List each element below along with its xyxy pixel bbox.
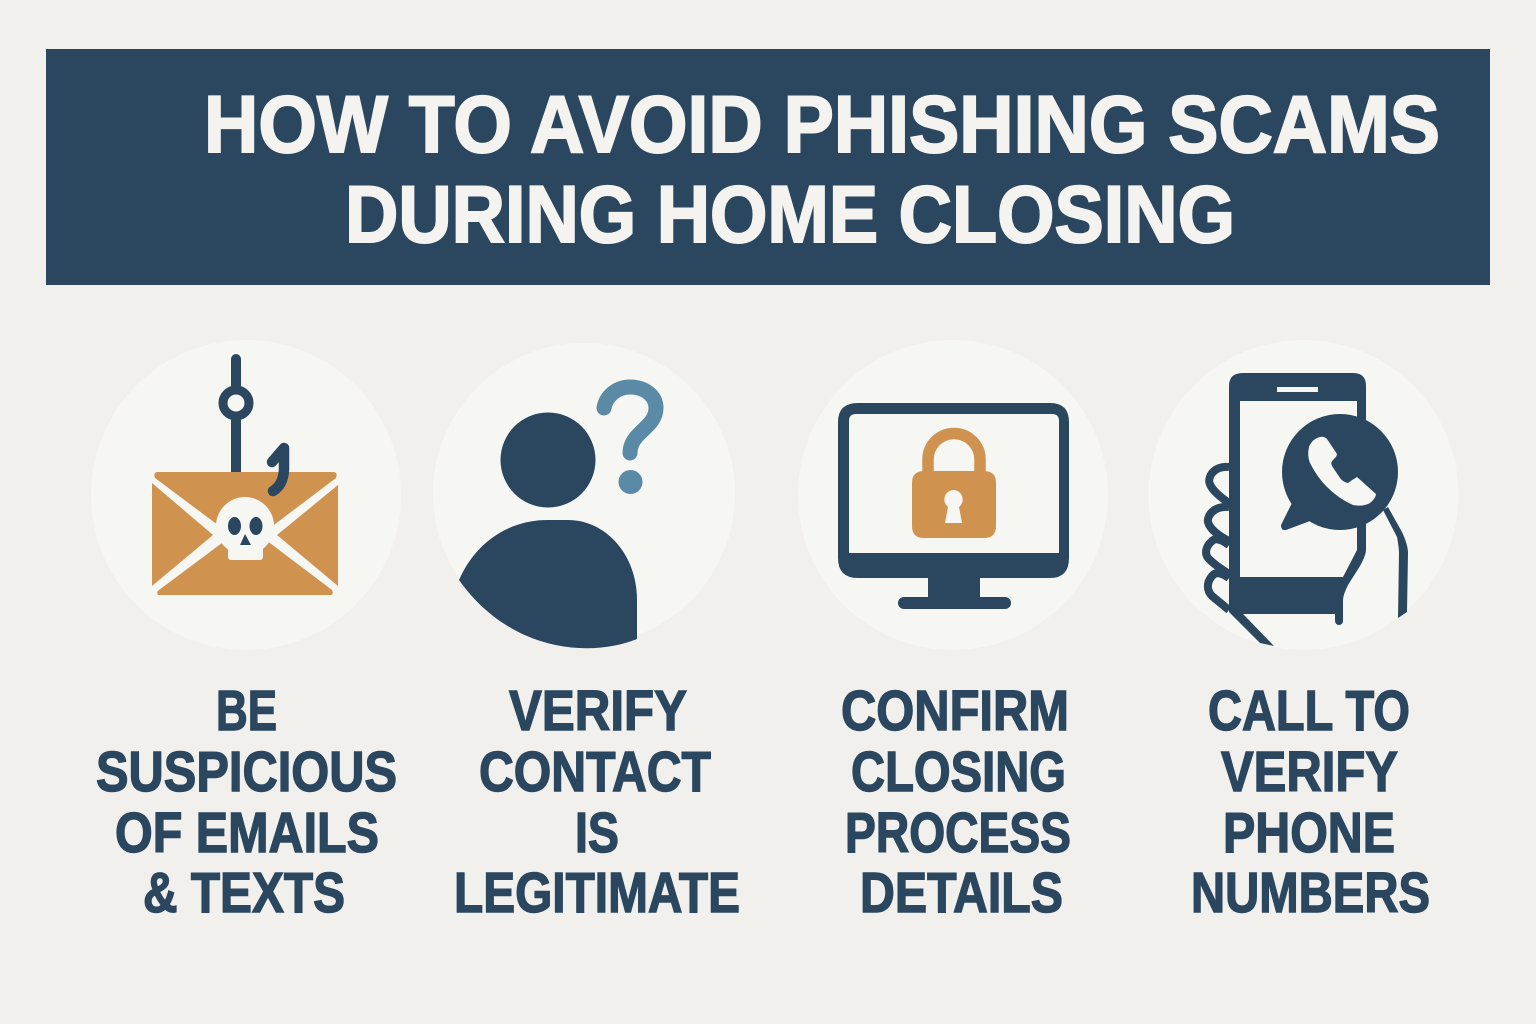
label: confirm closing — [841, 679, 1071, 925]
label: confirm closing: CLOSING — [851, 740, 1066, 804]
label: be suspicious: OF EMAILS — [115, 801, 379, 865]
icon: hand holding phone with call bubble — [1206, 373, 1408, 646]
icon: phishing email with hook and skull — [152, 359, 338, 595]
panel: verify contact — [433, 343, 740, 925]
title — [204, 80, 1440, 260]
label: confirm closing: PROCESS — [845, 801, 1071, 865]
label: call to verify: PHONE — [1223, 801, 1395, 865]
label: call to verify — [1191, 679, 1430, 925]
label: confirm closing: DETAILS — [860, 861, 1063, 925]
title: HOW TO AVOID PHISHING SCAMS — [204, 80, 1440, 170]
label: be suspicious — [96, 679, 397, 925]
panel: be suspicious — [91, 340, 401, 925]
icon: monitor with padlock — [838, 403, 1069, 609]
title: DURING HOME CLOSING — [345, 170, 1235, 260]
label: call to verify: NUMBERS — [1191, 861, 1430, 925]
label: confirm closing: CONFIRM — [841, 679, 1069, 743]
label: call to verify: CALL TO — [1208, 679, 1410, 743]
panel: confirm closing — [798, 340, 1108, 925]
icon: person with question mark — [459, 387, 656, 648]
label: verify contact: VERIFY — [509, 679, 687, 743]
label: verify contact: LEGITIMATE — [454, 861, 740, 925]
label: be suspicious: SUSPICIOUS — [96, 740, 397, 804]
panel: call to verify — [1148, 340, 1458, 925]
label: verify contact: CONTACT — [479, 740, 711, 804]
label: verify contact — [454, 679, 740, 925]
label: be suspicious: BE — [216, 679, 277, 743]
title banner — [46, 49, 1490, 285]
label: verify contact: IS — [575, 801, 619, 865]
label: be suspicious: & TEXTS — [143, 861, 345, 925]
label: call to verify: VERIFY — [1221, 740, 1398, 804]
